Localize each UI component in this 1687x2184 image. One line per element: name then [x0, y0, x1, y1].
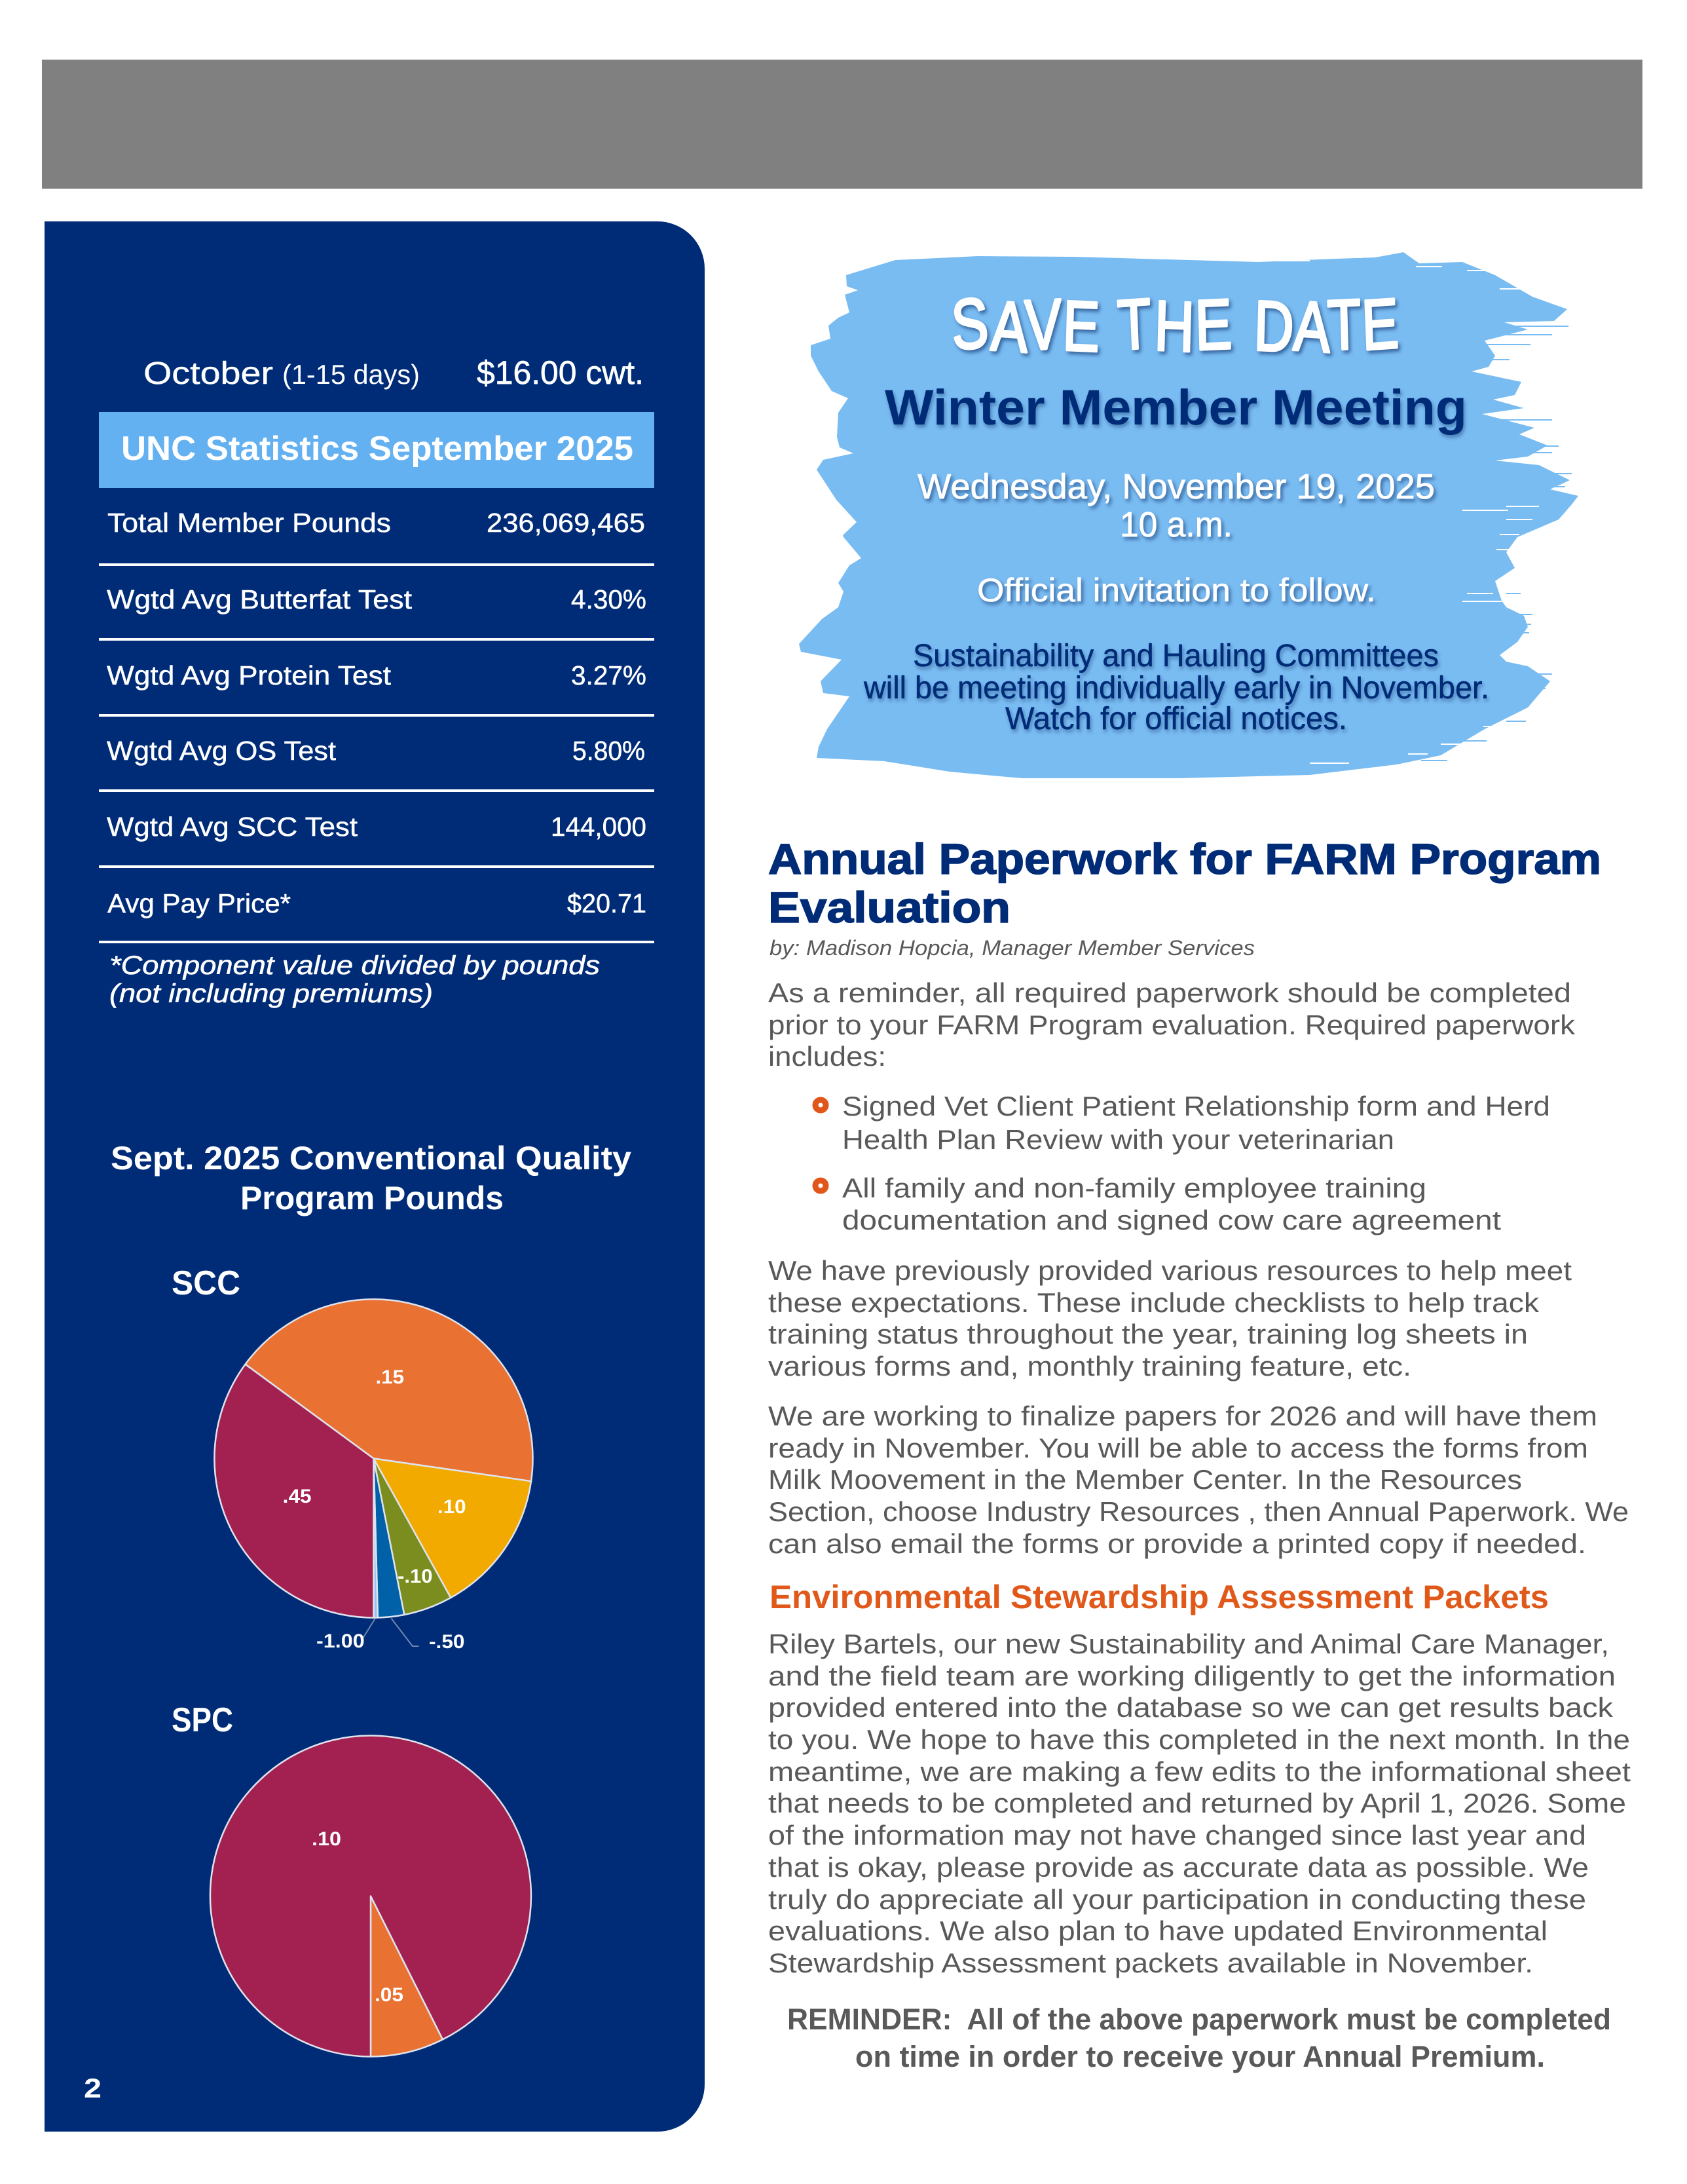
- statistics table: [99, 508, 654, 943]
- callout: save the date: [799, 252, 1578, 778]
- section body: and the field team are working diligently to get the information: [768, 1661, 1616, 1691]
- section body: truly do appreciate all your participation in conducting these: [768, 1884, 1586, 1915]
- page number: 2: [84, 2073, 102, 2103]
- label: SPC: SPC: [172, 1701, 233, 1739]
- statistics table: $20.71: [567, 888, 646, 918]
- label: SCC: SCC: [172, 1264, 240, 1302]
- paragraph: resources: We have previously provided various resources to help meet: [768, 1255, 1572, 1286]
- intro paragraph: prior to your FARM Program evaluation. Required paperwork: [768, 1009, 1576, 1040]
- pie chart: SCC: -.10: [398, 1566, 433, 1587]
- statistics table: Total Member Pounds: [107, 508, 391, 538]
- article heading: Annual Paperwork for FARM Program: [768, 835, 1601, 883]
- paragraph: resources: various forms and, monthly training feature, etc.: [768, 1351, 1411, 1382]
- pie chart: SCC: .45: [283, 1486, 312, 1507]
- pie chart: SCC: [214, 1299, 533, 1653]
- bullet item 2: All family and non-family employee training: [842, 1173, 1426, 1203]
- statistics table: 4.30%: [571, 584, 646, 614]
- pie chart: SPC: .05: [375, 1984, 403, 2006]
- statistics table: Wgtd Avg Protein Test: [107, 660, 392, 690]
- pie chart: SCC: .15: [376, 1366, 404, 1388]
- section body: meantime, we are making a few edits to the informational sheet: [768, 1756, 1631, 1787]
- article: annual paperwork: [768, 835, 1629, 1559]
- price line: October: October: [143, 356, 273, 391]
- byline: by: Madison Hopcia, Manager Member Services: [769, 936, 1255, 960]
- invitation note: Official invitation to follow.: [977, 572, 1376, 609]
- table heading: UNC Statistics: [99, 412, 654, 488]
- section body: evaluations. We also plan to have updated Environmental: [768, 1915, 1548, 1946]
- paragraph: 2026 papers: ready in November. You will be able to access the forms from: [768, 1433, 1588, 1463]
- intro paragraph: As a reminder, all required paperwork should be completed: [768, 977, 1571, 1008]
- committees note: Watch for official notices.: [1005, 702, 1347, 736]
- pie chart: SPC: [210, 1735, 531, 2057]
- pie chart: SPC: .10: [312, 1828, 341, 1850]
- bullet item 1: [815, 1091, 1550, 1155]
- section body: that is okay, please provide as accurate data as possible. We: [768, 1852, 1589, 1883]
- section body: Stewardship Assessment packets available in November.: [768, 1948, 1533, 1978]
- paragraph: 2026 papers: Section, choose Industry Resources , then Annual Paperwork. We: [768, 1496, 1629, 1527]
- price line: October: [143, 354, 644, 391]
- brush stroke background: [799, 252, 1578, 778]
- event date and time: 10 a.m.: [1120, 505, 1233, 544]
- intro paragraph: [768, 977, 1576, 1072]
- statistics table: 5.80%: [572, 736, 645, 766]
- paragraph: resources: training status throughout the year, training log sheets in: [768, 1319, 1528, 1349]
- intro paragraph: includes:: [768, 1041, 886, 1072]
- chart heading: [111, 1140, 631, 1216]
- pie chart: SCC: .10: [437, 1496, 466, 1518]
- section body: Riley Bartels, our new Sustainability and Animal Care Manager,: [768, 1629, 1609, 1659]
- section body: that needs to be completed and returned by April 1, 2026. Some: [768, 1788, 1626, 1818]
- reminder callout: on time in order to receive your Annual Premium.: [855, 2040, 1545, 2073]
- statistics table: Wgtd Avg OS Test: [107, 736, 337, 766]
- paragraph: 2026 papers: We are working to finalize papers for 2026 and will have them: [768, 1401, 1597, 1431]
- statistics table: Avg Pay Price*: [107, 888, 291, 918]
- section heading: Environmental Stewardship Assessment Packets: [769, 1579, 1549, 1615]
- header band: [42, 60, 1642, 189]
- event name: Winter Member Meeting: [885, 380, 1467, 436]
- committees note: will be meeting individually early in November.: [863, 671, 1489, 706]
- statistics table: 3.27%: [571, 660, 646, 690]
- footnote: (not including premiums): [109, 979, 433, 1008]
- paragraph: 2026 papers: can also email the forms or provide a printed copy if needed.: [768, 1528, 1586, 1559]
- event date and time: [918, 467, 1435, 544]
- heading: save the date: SAVE THE DATE: [950, 282, 1400, 367]
- reminder callout: [787, 2003, 1611, 2073]
- event date and time: Wednesday, November 19, 2025: [918, 467, 1435, 506]
- section body: of the information may not have changed since last year and: [768, 1820, 1586, 1851]
- statistics table: Wgtd Avg SCC Test: [107, 812, 358, 842]
- paragraph: 2026 papers: [768, 1401, 1629, 1559]
- chart heading: Program Pounds: [240, 1180, 504, 1216]
- article heading: [768, 835, 1601, 932]
- committees note: Sustainability and Hauling Committees: [913, 639, 1439, 673]
- pie chart: SCC: -.50: [429, 1631, 465, 1653]
- panel: milk statistics sidebar: [45, 221, 705, 2132]
- committees note: [863, 639, 1489, 736]
- section body: [768, 1629, 1631, 1978]
- section body: provided entered into the database so we can get results back: [768, 1692, 1614, 1723]
- article: environmental stewardship: [768, 1579, 1631, 2073]
- price line: October: (1-15 days): [282, 359, 420, 390]
- reminder callout: REMINDER: All of the above paperwork must be completed: [787, 2003, 1611, 2036]
- pie chart: SCC: -1.00: [316, 1630, 365, 1652]
- bullet item 2: [815, 1173, 1501, 1235]
- article heading: Evaluation: [768, 883, 1010, 932]
- bullet item 1: Signed Vet Client Patient Relationship form and Herd: [842, 1091, 1550, 1121]
- paragraph: 2026 papers: Milk Moovement in the Member Center. In the Resources: [768, 1464, 1522, 1495]
- bullet item 2: documentation and signed cow care agreement: [842, 1205, 1501, 1235]
- statistics table: 236,069,465: [487, 508, 645, 538]
- section body: to you. We hope to have this completed in the next month. In the: [768, 1724, 1630, 1755]
- footnote: [109, 951, 600, 1008]
- paragraph: resources: these expectations. These include checklists to help track: [768, 1287, 1540, 1318]
- paragraph: resources: [768, 1255, 1572, 1382]
- chart heading: Sept. 2025 Conventional Quality: [111, 1140, 631, 1177]
- footnote: *Component value divided by pounds: [109, 951, 600, 980]
- table heading: UNC Statistics: UNC Statistics September 2025: [121, 430, 633, 468]
- price line: October: $16.00 cwt.: [477, 354, 644, 391]
- statistics table: Wgtd Avg Butterfat Test: [107, 584, 413, 614]
- statistics table: 144,000: [551, 812, 646, 842]
- bullet item 1: Health Plan Review with your veterinarian: [842, 1124, 1394, 1155]
